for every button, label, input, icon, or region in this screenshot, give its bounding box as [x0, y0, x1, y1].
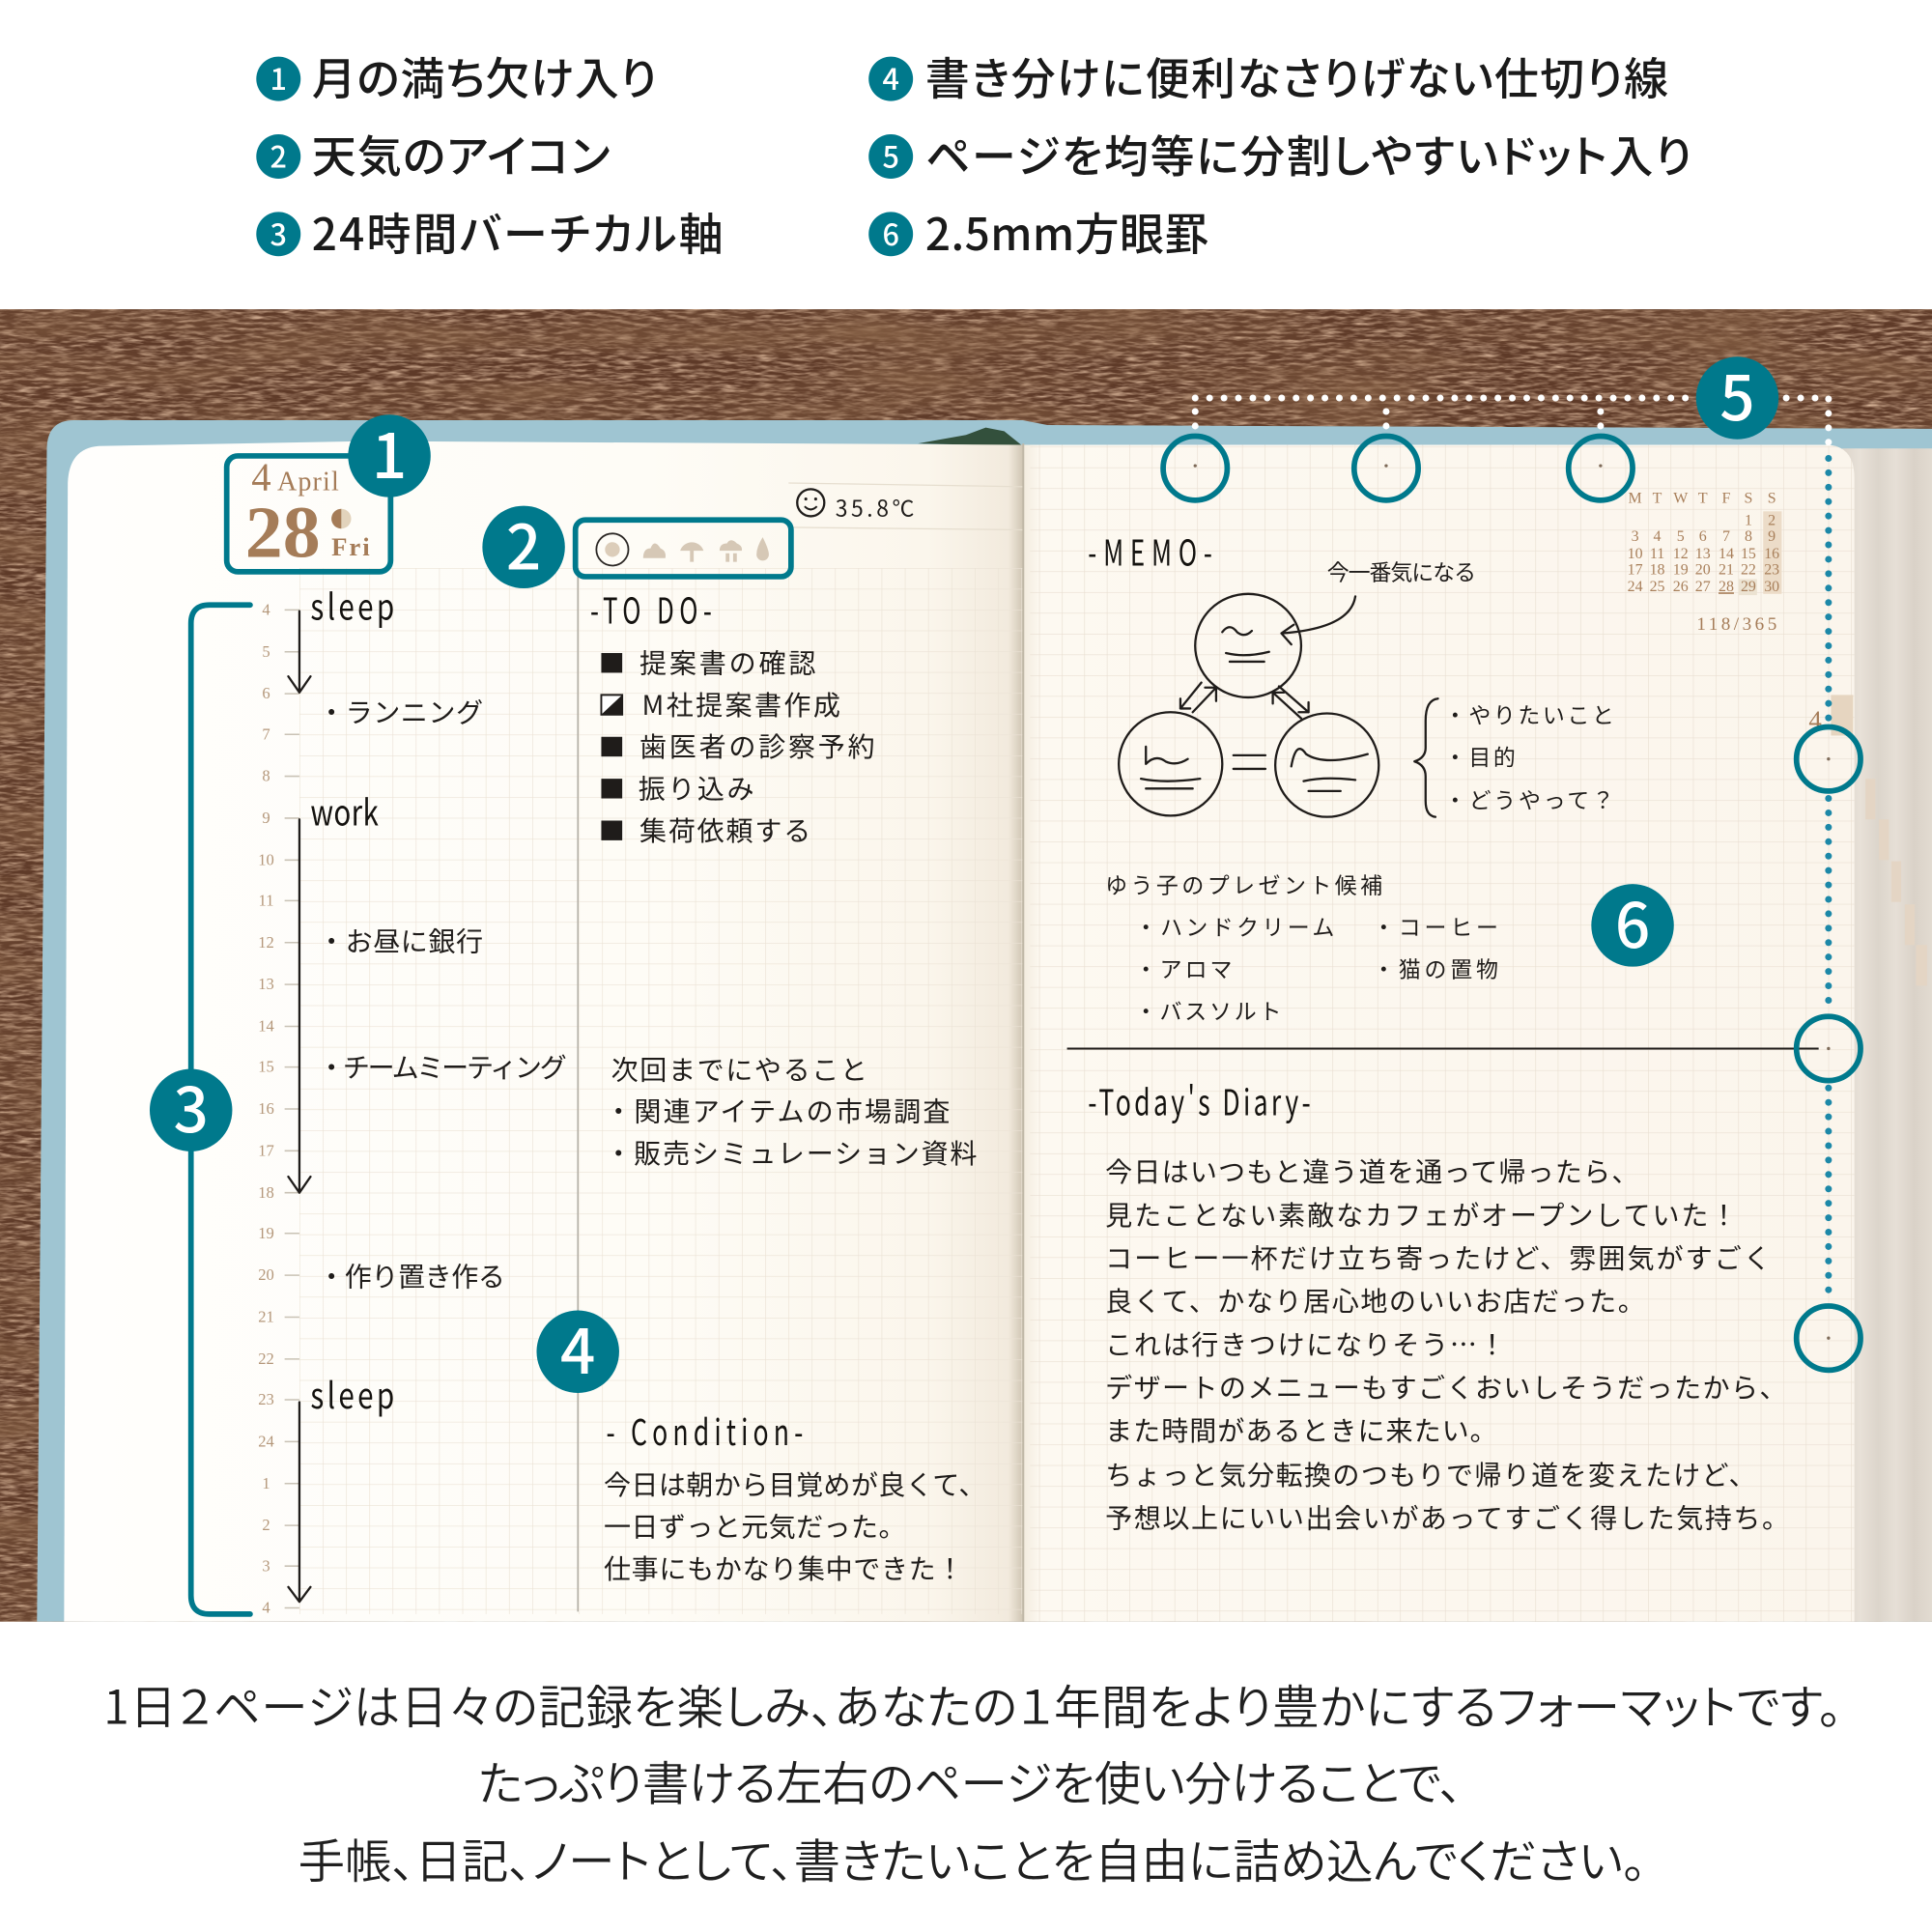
memo brace and list: ・目的 [1444, 739, 1516, 772]
today's diary: ちょっと気分転換のつもりで帰り道を変えたけど、 [1105, 1454, 1756, 1493]
badge 6: 6 [1615, 877, 1650, 966]
vertical 24 hour axis: 22 [258, 1350, 274, 1368]
vertical 24 hour axis: 24 [258, 1432, 275, 1450]
today's diary: コーヒー一杯だけ立ち寄ったけど、雰囲気がすごく [1105, 1236, 1771, 1277]
mini calendar: 13 [1695, 546, 1711, 562]
vertical 24 hour axis: 18 [258, 1183, 274, 1202]
mini calendar: 6 [1699, 528, 1707, 545]
vertical 24 hour axis: 3 [262, 1556, 270, 1575]
mini calendar: 12 [1673, 546, 1689, 562]
date block: Fri [331, 532, 370, 561]
vertical 24 hour axis: 4 [262, 1599, 270, 1617]
page stack on the right [1842, 448, 1932, 1622]
mini calendar: 16 [1764, 546, 1779, 562]
bottom description: たっぷり書ける左右のページを使い分けることで、 [478, 1747, 1463, 1814]
mini calendar: 5 [1677, 528, 1685, 545]
mini calendar: 20 [1695, 561, 1711, 578]
legend item 1: 1 [270, 55, 287, 99]
today's diary: また時間があるときに来たい。 [1105, 1409, 1497, 1449]
schedule handwriting: ・お昼に銀行 [318, 921, 483, 960]
mini calendar: 27 [1695, 579, 1711, 595]
mini calendar: 11 [1650, 546, 1664, 562]
badge 2 [482, 498, 565, 588]
wooden table background [0, 309, 1932, 1622]
today's diary: これは行きつけになりそう…！ [1105, 1323, 1506, 1363]
badge 6 [1591, 877, 1674, 967]
vertical 24 hour axis: 5 [262, 642, 270, 661]
today's diary: -Today's Diary- [1088, 1075, 1311, 1126]
to do list: 歯医者の診察予約 [639, 725, 875, 765]
to do list: -TO DO- [590, 583, 712, 635]
mini calendar: W [1673, 490, 1689, 506]
mini calendar: 29 [1741, 579, 1756, 595]
present ideas list: ・バスソルト [1135, 993, 1282, 1026]
badge 4: 4 [560, 1303, 595, 1392]
vertical 24 hour axis: 8 [262, 767, 270, 785]
mini calendar: 10 [1628, 546, 1643, 562]
vertical 24 hour axis: 23 [258, 1390, 274, 1408]
schedule handwriting: sleep [310, 1367, 394, 1419]
vertical 24 hour axis: 7 [262, 724, 270, 743]
condition notes: 一日ずっと元気だった。 [604, 1506, 906, 1546]
schedule handwriting: sleep [310, 579, 394, 631]
vertical 24 hour axis: 9 [262, 809, 270, 827]
badge 3: 3 [174, 1062, 209, 1151]
legend item 2: 天気のアイコン [312, 123, 610, 186]
schedule handwriting: ・ランニング [318, 691, 483, 730]
dot markers [1163, 437, 1861, 1370]
mini calendar: 2 [1768, 512, 1776, 528]
date block [227, 456, 390, 574]
dotted guides for page dots [1195, 398, 1829, 1301]
memo heading: -MEMO- [1088, 526, 1212, 577]
mini calendar: 118/365 [1696, 614, 1776, 635]
condition notes: 仕事にもかなり集中できた！ [604, 1548, 963, 1587]
legend item 2: 2 [270, 132, 287, 176]
to do list: 提案書の確認 [639, 641, 815, 681]
badge 3 [150, 1062, 232, 1151]
today's diary: 予想以上にいい出会いがあってすごく得した気持ち。 [1105, 1497, 1789, 1537]
today's diary [1088, 1075, 1789, 1537]
vertical 24 hour axis: 13 [258, 975, 274, 993]
badge 5 [1696, 350, 1778, 440]
next time notes: ・関連アイテムの市場調査 [605, 1091, 950, 1130]
legend item 5: 5 [882, 132, 899, 176]
vertical 24 hour axis: 20 [258, 1265, 274, 1284]
legend item 4: 書き分けに便利なさりげない仕切り線 [925, 44, 1668, 108]
bottom description: 1日２ページは日々の記録を楽しみ、あなたの１年間をより豊かにするフォーマットです。 [103, 1669, 1842, 1737]
mini calendar: 28 [1719, 579, 1734, 595]
right page [1023, 443, 1855, 1622]
badge 1: 1 [372, 408, 407, 497]
green bookmark peeking behind the pages [918, 428, 1023, 446]
legend item 6: 6 [882, 211, 899, 254]
schedule handwriting: ・作り置き作る [318, 1256, 505, 1295]
next time notes: 次回までにやること [611, 1048, 867, 1088]
memo diagram: three circles [1119, 554, 1476, 817]
vertical 24 hour axis: 1 [262, 1474, 270, 1492]
mini calendar: T [1653, 490, 1662, 506]
mini calendar: 1 [1745, 512, 1752, 528]
legend: feature list [256, 44, 1691, 264]
vertical 24 hour axis [258, 600, 299, 1617]
date block: 28 [245, 492, 321, 574]
legend item 1: 月の満ち欠け入り [312, 44, 657, 108]
mini calendar: 24 [1628, 579, 1643, 595]
mini calendar: T [1698, 490, 1708, 506]
memo brace and list [1414, 697, 1614, 817]
legend item 4: 4 [882, 55, 899, 99]
mini calendar: 4 [1654, 528, 1662, 545]
badge 5: 5 [1719, 350, 1755, 439]
today's diary: 今日はいつもと違う道を通って帰ったら、 [1105, 1151, 1638, 1190]
mini calendar: F [1722, 490, 1731, 506]
mini calendar: 18 [1650, 561, 1665, 578]
condition notes: 今日は朝から目覚めが良くて、 [604, 1463, 985, 1503]
vertical 24 hour axis: 15 [258, 1058, 274, 1076]
mini calendar: 7 [1722, 528, 1730, 545]
mini calendar: 21 [1719, 561, 1734, 578]
vertical 24 hour axis: 19 [258, 1224, 274, 1242]
vertical 24 hour axis: 17 [258, 1141, 274, 1159]
mini calendar: 26 [1673, 579, 1689, 595]
mini calendar: 30 [1764, 579, 1779, 595]
mini calendar: 8 [1745, 528, 1752, 545]
condition: face and temperature: 35.8℃ [836, 490, 914, 523]
present ideas list: ・猫の置物 [1373, 951, 1498, 983]
vertical 24 hour axis: 2 [262, 1516, 270, 1534]
condition notes [604, 1406, 985, 1587]
today's diary: デザートのメニューもすごくおいしそうだったから、 [1105, 1366, 1786, 1406]
mini calendar: 25 [1650, 579, 1665, 595]
schedule handwriting: ・チームミーティング [318, 1046, 567, 1086]
mini calendar: 19 [1673, 561, 1689, 578]
today's diary: 見たことない素敵なカフェがオープンしていた！ [1105, 1194, 1737, 1234]
present ideas list [1105, 867, 1498, 1026]
present ideas list: ・コーヒー [1373, 909, 1498, 942]
present ideas list: ゆう子のプレゼント候補 [1105, 867, 1382, 900]
today's diary: 良くて、かなり居心地のいいお店だった。 [1105, 1280, 1645, 1320]
mini calendar [1628, 490, 1781, 635]
left page [64, 441, 1023, 1622]
legend item 3: 24時間バーチカル軸 [312, 200, 724, 264]
bottom description [103, 1669, 1842, 1891]
legend item 6: 2.5mm方眼罫 [925, 200, 1208, 264]
date block: 4 [251, 456, 271, 499]
next time notes [605, 1048, 977, 1172]
photo: open notebook on wooden table [0, 309, 1932, 1622]
date block: April [277, 468, 339, 497]
divider line [1067, 1047, 1819, 1049]
badge 1 [348, 408, 431, 497]
vertical 24 hour axis: 12 [258, 933, 274, 952]
condition notes: - Condition- [607, 1406, 803, 1457]
memo brace and list: ・どうやって？ [1444, 782, 1614, 815]
blue notebook cover [37, 420, 1932, 1622]
legend item 3: 3 [270, 211, 287, 254]
next time notes: ・販売シミュレーション資料 [605, 1132, 977, 1172]
badge 2: 2 [506, 498, 541, 587]
to do list [590, 583, 875, 849]
mini calendar: 9 [1768, 528, 1776, 545]
sleep and work arrows [288, 611, 310, 1602]
badge 4 [536, 1303, 619, 1393]
vertical 24 hour axis: 10 [258, 850, 274, 868]
weather icons with highlight frame [576, 520, 791, 577]
mini calendar: 23 [1764, 561, 1779, 578]
vertical 24 hour axis: 4 [262, 600, 270, 618]
mini calendar: 17 [1628, 561, 1643, 578]
time axis bracket [191, 605, 250, 1614]
month index tab: 4 [1808, 705, 1822, 734]
mini calendar: S [1745, 490, 1752, 506]
mini calendar: 14 [1719, 546, 1734, 562]
vertical 24 hour axis: 16 [258, 1099, 274, 1118]
schedule handwriting [310, 579, 567, 1419]
memo brace and list: ・やりたいこと [1444, 697, 1614, 730]
mini calendar: M [1629, 490, 1642, 506]
mini calendar: S [1768, 490, 1776, 506]
to do list: 集荷依頼する [639, 810, 810, 849]
condition: face and temperature [797, 489, 914, 523]
to do list: 振り込み [639, 768, 754, 808]
present ideas list: ・アロマ [1135, 951, 1233, 983]
mini calendar: 22 [1741, 561, 1756, 578]
mini calendar: 15 [1741, 546, 1756, 562]
present ideas list: ・ハンドクリーム [1135, 909, 1334, 942]
vertical 24 hour axis: 11 [259, 891, 273, 909]
bottom description: 手帳、日記、ノートとして、書きたいことを自由に詰め込んでください。 [298, 1824, 1646, 1891]
memo diagram: three circles: 今一番気になる [1327, 554, 1476, 587]
vertical 24 hour axis: 6 [262, 684, 270, 702]
vertical 24 hour axis: 21 [258, 1308, 274, 1326]
mini calendar: 3 [1632, 528, 1639, 545]
to do list: M社提案書作成 [642, 684, 840, 724]
month index tab [1808, 695, 1853, 735]
schedule handwriting: work [310, 784, 379, 837]
vertical 24 hour axis: 14 [258, 1017, 275, 1036]
legend item 5: ページを均等に分割しやすいドット入り [925, 123, 1691, 186]
